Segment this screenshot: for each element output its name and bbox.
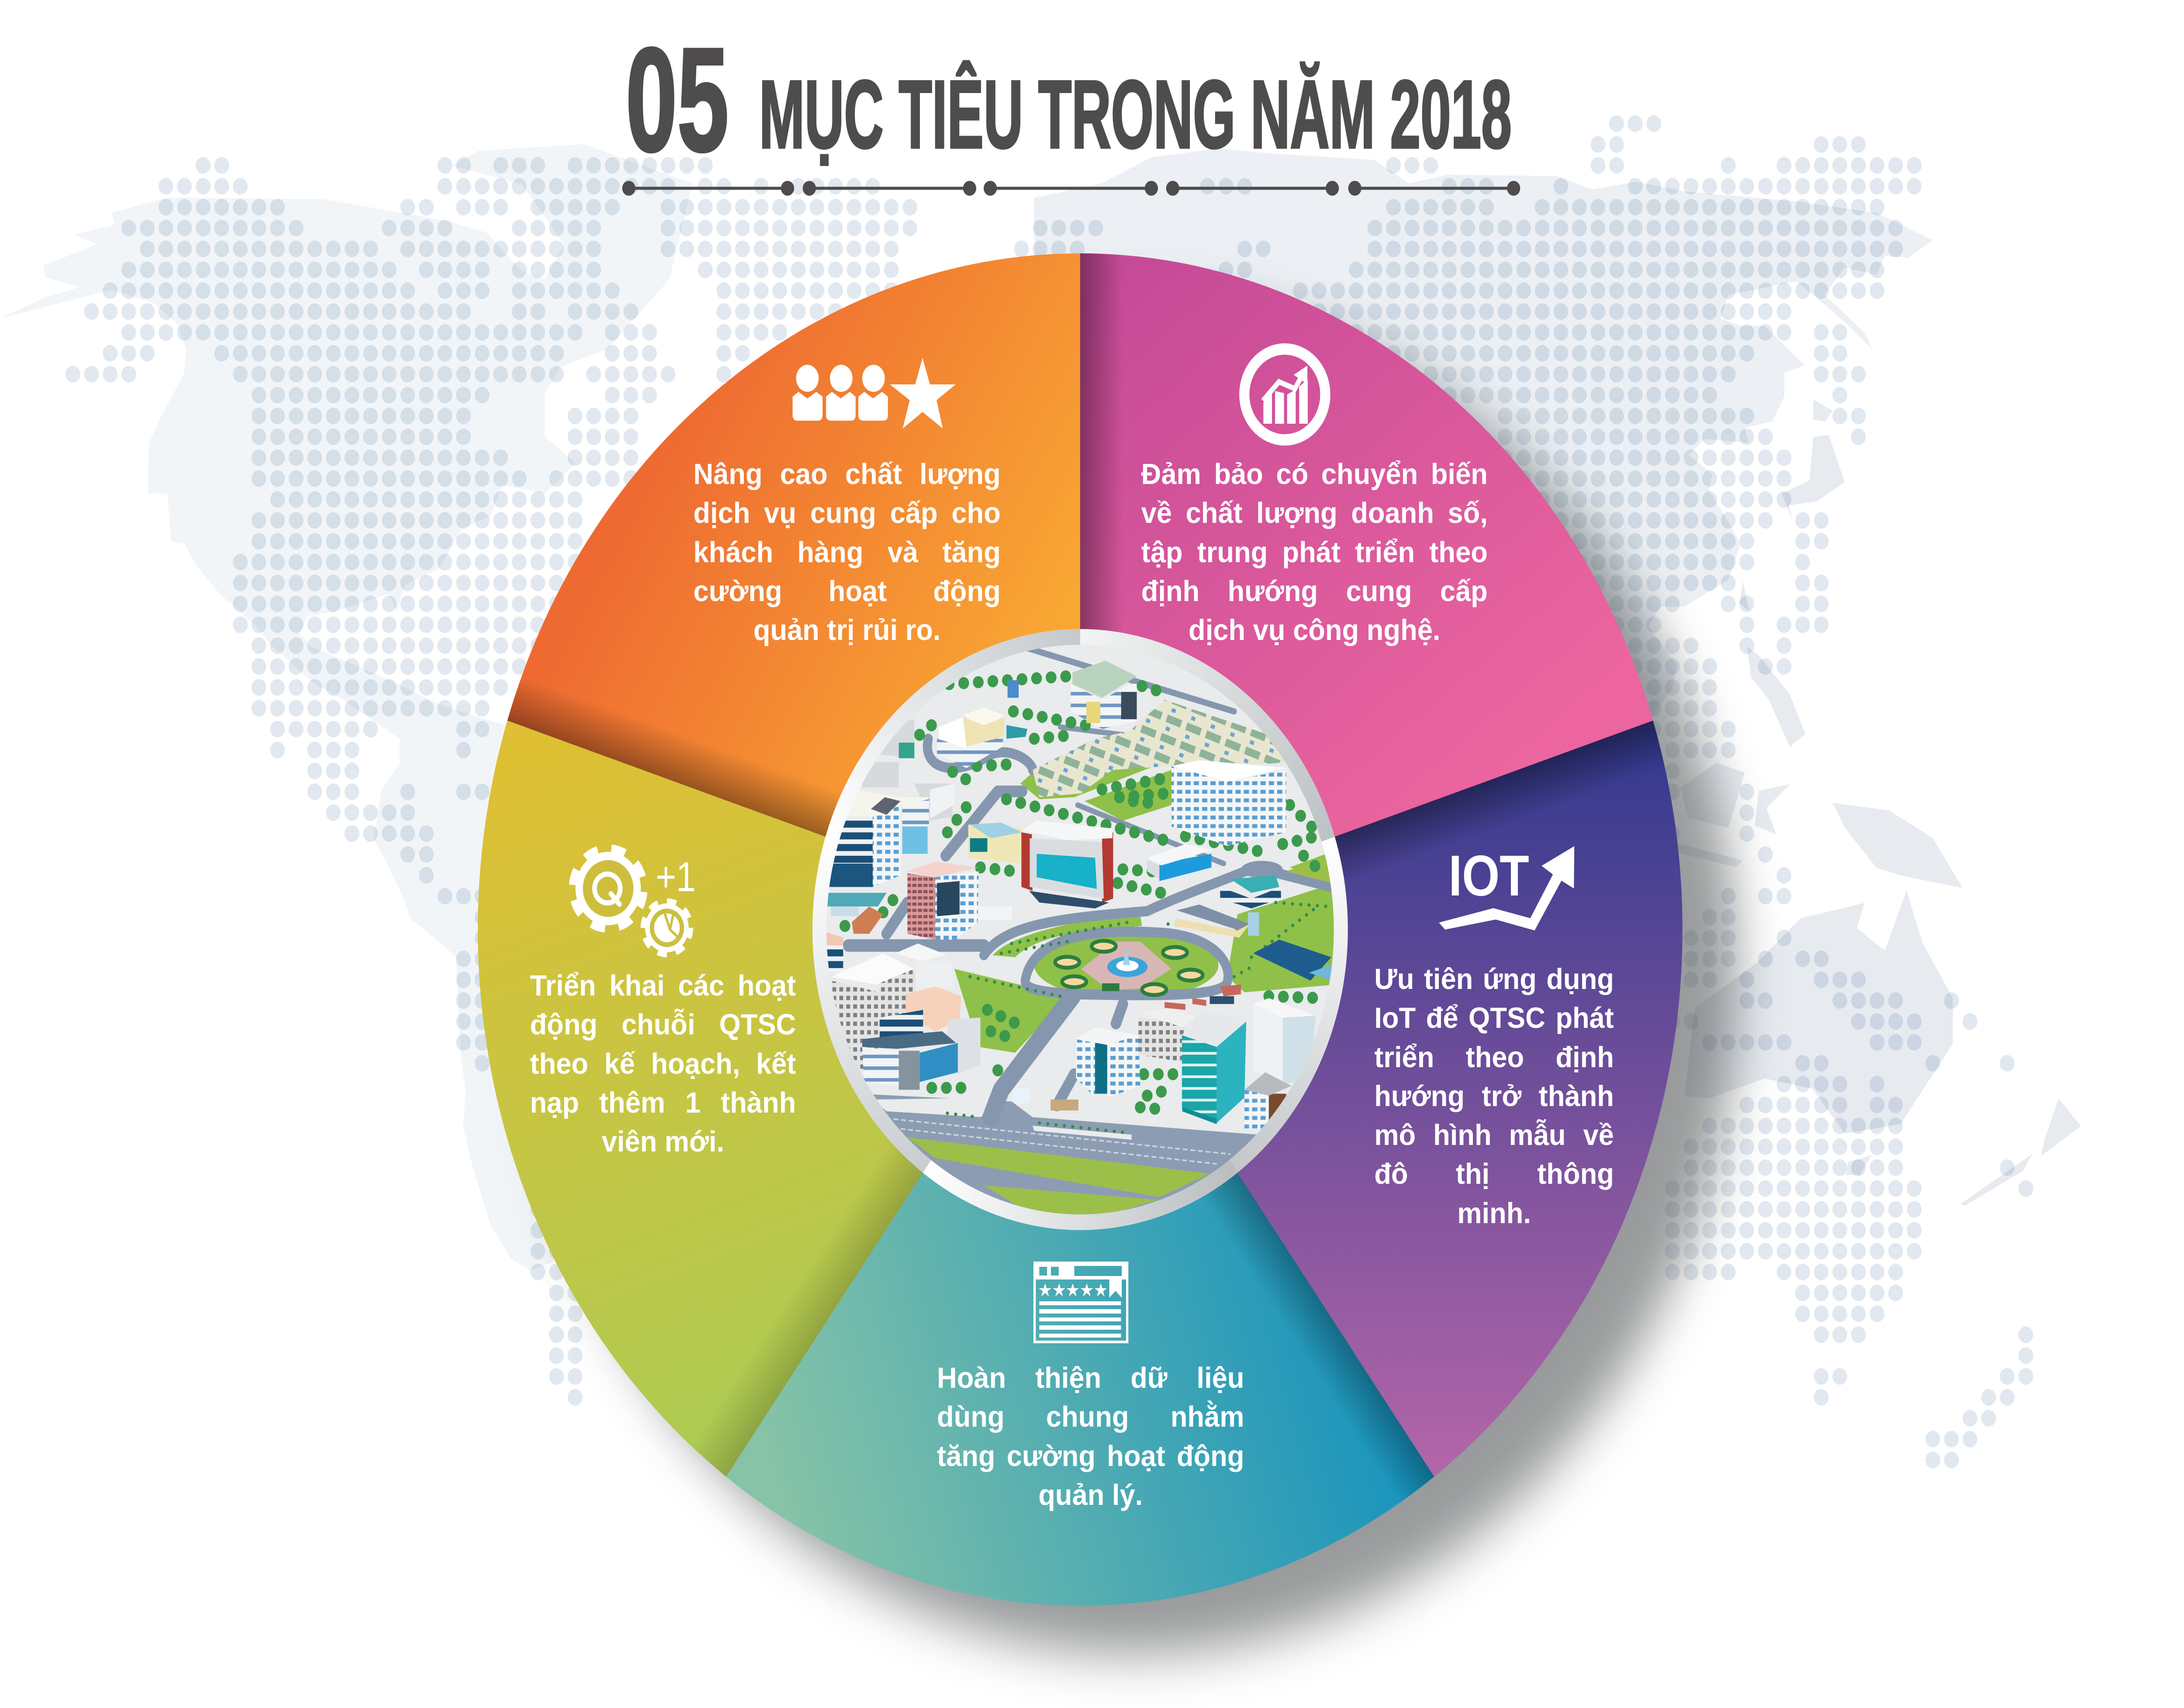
icon: IOT rising arrow: IOT [1448, 844, 1529, 908]
text block: orange panel: dịch vụ cung cấp cho [693, 497, 1001, 529]
text block: orange panel: quản trị rủi ro. [753, 614, 941, 647]
icon: review page with five stars [1033, 1262, 1128, 1343]
text block: pink panel [1141, 455, 1491, 656]
text block: purple panel: Ưu tiên ứng dụng [1374, 963, 1614, 996]
text block: purple panel: mô hình mẫu về [1374, 1119, 1614, 1151]
title: 05: 05 [625, 17, 729, 182]
text block: orange panel: Nâng cao chất lượng [693, 458, 1001, 491]
text block: yellow-green panel: nạp thêm 1 thành [530, 1086, 796, 1119]
text block: orange panel: khách hàng và tăng [693, 536, 1001, 569]
text block: pink panel: tập trung phát triển theo [1141, 536, 1488, 569]
wheel panel: QTSC chain (yellow-green) [478, 721, 1080, 1476]
text block: orange panel: cường hoạt động [693, 575, 1001, 608]
text block: purple panel: minh. [1457, 1197, 1531, 1230]
icon: IOT rising arrow [1439, 844, 1574, 930]
wheel panel: quality of service (orange) [507, 253, 1080, 930]
icon: gears with +1: +1 [656, 854, 696, 900]
text block: pink panel: Đảm bảo có chuyển biến [1141, 458, 1488, 491]
text block: teal panel: Hoàn thiện dữ liệu [937, 1362, 1244, 1394]
text block: purple panel: triển theo định [1374, 1041, 1614, 1074]
text block: pink panel: về chất lượng doanh số, [1141, 497, 1488, 529]
text block: teal panel: quản lý. [1038, 1479, 1143, 1511]
text block: yellow-green panel: Triển khai các hoạt [530, 969, 796, 1002]
text block: purple panel: IoT để QTSC phát [1374, 1002, 1614, 1034]
world map dot grid [73, 124, 2026, 1460]
world map landmass [0, 144, 2081, 1271]
text block: orange panel [693, 455, 1005, 656]
text block: teal panel: dùng chung nhằm [937, 1400, 1244, 1433]
icon: gears with +1 [570, 846, 696, 954]
title: main line: MỤC TIÊU TRONG NĂM 2018 [759, 61, 1512, 169]
text block: yellow-green panel: theo kế hoạch, kết [530, 1048, 796, 1080]
text block: teal panel [937, 1359, 1248, 1520]
text block: yellow-green panel: động chuỗi QTSC [530, 1008, 796, 1041]
wheel panel: revenue (pink) [1080, 253, 1653, 930]
text block: purple panel: hướng trở thành [1374, 1080, 1614, 1113]
text block: purple panel [1374, 960, 1619, 1239]
centre illustration: smart city [826, 645, 1334, 1214]
title underline with dots [622, 181, 1520, 196]
text block: purple panel: đô thị thông [1374, 1158, 1614, 1190]
drop shadow of the wheel [532, 301, 1737, 1654]
icon: three people and star [793, 358, 956, 429]
text block: teal panel: tăng cường hoạt động [937, 1440, 1244, 1473]
text block: pink panel: dịch vụ công nghệ. [1189, 614, 1440, 647]
text block: pink panel: định hướng cung cấp [1141, 575, 1488, 608]
centre ring [820, 638, 1340, 1221]
text block: yellow-green panel [530, 966, 800, 1167]
text block: yellow-green panel: viên mới. [601, 1125, 724, 1158]
wheel panel: shared data (teal) [726, 930, 1434, 1606]
icon: growth chart in circle [1244, 349, 1325, 440]
wheel panel: IoT (purple) [1080, 721, 1683, 1476]
